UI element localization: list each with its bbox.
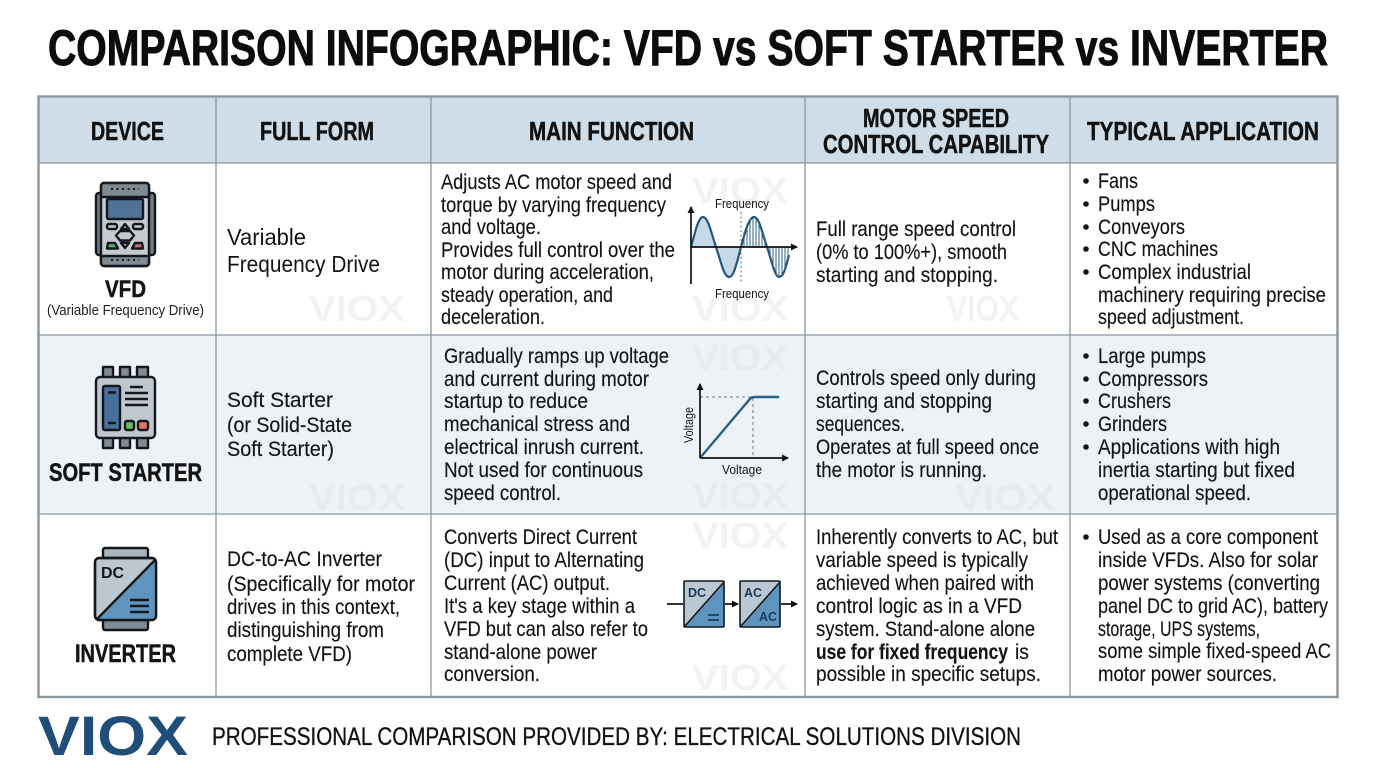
chart: voltage ramp bbox=[681, 384, 788, 477]
main function: Soft Starter bbox=[444, 345, 669, 505]
main function: VFD: torque by varying frequency bbox=[441, 194, 666, 217]
applications: Inverter: motor power sources. bbox=[1098, 663, 1277, 686]
speed control: Soft Starter: sequences. bbox=[816, 413, 905, 436]
applications: VFD: Pumps bbox=[1098, 193, 1155, 216]
sublabel: Variable Frequency Drive: (Variable Frequency Drive) bbox=[47, 302, 204, 319]
label: VFD: VFD bbox=[105, 276, 146, 303]
watermarks bbox=[309, 170, 1055, 698]
main function: Soft Starter: Not used for continuous bbox=[444, 459, 643, 482]
applications: VFD: CNC machines bbox=[1098, 238, 1218, 261]
label: Inverter: INVERTER bbox=[75, 640, 176, 668]
applications: Inverter: storage, UPS systems, bbox=[1098, 618, 1260, 641]
grid lines bbox=[38, 96, 1338, 697]
chart: frequency sine wave: Frequency bbox=[715, 286, 769, 301]
full form: Inverter: complete VFD) bbox=[227, 643, 352, 666]
applications: VFD: speed adjustment. bbox=[1098, 306, 1244, 329]
watermarks: VIOX bbox=[947, 288, 1019, 329]
applications: Soft Starter: inertia starting but fixed bbox=[1098, 459, 1295, 482]
icon: soft starter bbox=[96, 367, 155, 448]
speed control: VFD: (0% to 100%+), smooth bbox=[816, 241, 1007, 264]
full form: VFD: Frequency Drive bbox=[227, 251, 380, 277]
main function: Soft Starter: mechanical stress and bbox=[444, 413, 630, 436]
main function: VFD: steady operation, and bbox=[441, 284, 613, 307]
row: VFD bbox=[47, 170, 1326, 329]
speed control: VFD bbox=[816, 218, 1016, 287]
watermarks: VIOX bbox=[692, 288, 788, 329]
speed control: Inverter: Inherently converts to AC, but bbox=[816, 526, 1058, 549]
watermarks: VIOX bbox=[309, 477, 405, 518]
logo: VIOX: VIOX bbox=[38, 704, 188, 767]
speed control: Soft Starter: Operates at full speed once bbox=[816, 436, 1039, 459]
row 2 background bbox=[38, 335, 1338, 514]
speed control: Soft Starter: starting and stopping bbox=[816, 390, 992, 413]
applications: VFD: Complex industrial bbox=[1098, 261, 1251, 284]
applications: Soft Starter: Grinders bbox=[1098, 413, 1167, 436]
applications: Soft Starter bbox=[1083, 345, 1295, 505]
table header background bbox=[38, 97, 1338, 163]
diagram: DC to AC conversion bbox=[667, 581, 797, 627]
applications: Inverter: Used as a core component bbox=[1098, 526, 1318, 549]
speed control: Soft Starter bbox=[816, 367, 1039, 482]
main function: VFD: deceleration. bbox=[441, 306, 545, 329]
applications: Soft Starter: Large pumps bbox=[1098, 345, 1206, 368]
chart: frequency sine wave: Frequency bbox=[715, 196, 769, 211]
speed control: Inverter: is bbox=[1015, 641, 1029, 664]
main function: Inverter: (DC) input to Alternating bbox=[444, 549, 644, 572]
footer credit: PROFESSIONAL COMPARISON PROVIDED BY: ELECTRICAL SOLUTIONS DIVISION bbox=[212, 723, 1021, 751]
main function: Inverter: conversion. bbox=[444, 663, 540, 686]
speed control: Soft Starter: the motor is running. bbox=[816, 459, 987, 482]
main function: Inverter: It's a key stage within a bbox=[444, 595, 635, 618]
watermarks: VIOX bbox=[692, 170, 788, 211]
main function: VFD: Provides full control over the bbox=[441, 239, 675, 262]
speed control: Inverter: achieved when paired with bbox=[816, 572, 1034, 595]
speed control: Inverter: variable speed is typically bbox=[816, 549, 1028, 572]
comparison table bbox=[38, 96, 1338, 698]
watermarks: VIOX bbox=[309, 288, 405, 329]
speed control: Inverter: possible in specific setups. bbox=[816, 663, 1041, 686]
header: full form: FULL FORM bbox=[260, 116, 374, 146]
header: motor speed control capability bbox=[823, 103, 1049, 159]
header: motor speed control capability: CONTROL CAPABILITY bbox=[823, 129, 1049, 159]
applications: Soft Starter: operational speed. bbox=[1098, 482, 1251, 505]
watermarks: VIOX bbox=[692, 515, 788, 556]
full form: Inverter: (Specifically for motor bbox=[227, 573, 415, 596]
applications: VFD bbox=[1083, 170, 1326, 329]
speed control: VFD: starting and stopping. bbox=[816, 264, 998, 287]
main function: Inverter: Converts Direct Current bbox=[444, 526, 637, 549]
label: Soft Starter: SOFT STARTER bbox=[49, 459, 202, 487]
row: Soft Starter bbox=[49, 345, 1295, 505]
main function: Soft Starter: speed control. bbox=[444, 482, 561, 505]
applications: Soft Starter: Compressors bbox=[1098, 368, 1208, 391]
diagram: DC to AC conversion: AC bbox=[759, 610, 777, 624]
chart: voltage ramp: Voltage bbox=[681, 407, 696, 443]
full form: VFD: Variable bbox=[227, 224, 306, 250]
applications: Inverter: some simple fixed-speed AC bbox=[1098, 640, 1331, 663]
row: Inverter bbox=[75, 526, 1331, 686]
main function: Inverter: VFD but can also refer to bbox=[444, 618, 648, 641]
applications: Inverter: inside VFDs. Also for solar bbox=[1098, 549, 1318, 572]
full form: Inverter: distinguishing from bbox=[227, 619, 384, 642]
main function: Inverter: stand-alone power bbox=[444, 641, 597, 664]
applications: Soft Starter: Applications with high bbox=[1098, 436, 1280, 459]
main function: VFD: and voltage. bbox=[441, 216, 541, 239]
speed control: Inverter: use for fixed frequency bbox=[816, 641, 1008, 664]
watermarks: VIOX bbox=[692, 657, 788, 698]
watermarks: VIOX bbox=[955, 477, 1055, 518]
watermarks: VIOX bbox=[692, 337, 788, 378]
header: motor speed control capability: MOTOR SPEED bbox=[863, 103, 1009, 133]
applications: VFD: machinery requiring precise bbox=[1098, 284, 1326, 307]
icon: VFD drive bbox=[96, 183, 155, 266]
applications: Inverter: power systems (converting bbox=[1098, 572, 1320, 595]
diagram: DC to AC conversion: AC bbox=[744, 586, 762, 600]
main function: Soft Starter: electrical inrush current. bbox=[444, 436, 644, 459]
watermarks: VIOX bbox=[692, 475, 788, 516]
full form: Inverter: drives in this context, bbox=[227, 596, 400, 619]
applications: Inverter: panel DC to grid AC), battery bbox=[1098, 595, 1328, 618]
speed control: Soft Starter: Controls speed only during bbox=[816, 367, 1036, 390]
header: main function: MAIN FUNCTION bbox=[529, 116, 694, 146]
icon: inverter bbox=[95, 548, 156, 630]
full form: Soft Starter: Soft Starter bbox=[227, 389, 333, 412]
chart: frequency sine wave bbox=[691, 196, 797, 301]
full form: Soft Starter: Soft Starter) bbox=[227, 438, 334, 461]
full form: Inverter bbox=[227, 548, 415, 666]
applications: Soft Starter: Crushers bbox=[1098, 390, 1171, 413]
main function: Soft Starter: and current during motor bbox=[444, 368, 649, 391]
main function: Soft Starter: startup to reduce bbox=[444, 390, 588, 413]
speed control: Inverter: system. Stand-alone alone bbox=[816, 618, 1035, 641]
chart: voltage ramp: Voltage bbox=[722, 462, 762, 477]
diagram: DC to AC conversion: DC bbox=[688, 586, 706, 600]
applications: VFD: Fans bbox=[1098, 170, 1138, 193]
main function: VFD bbox=[441, 171, 675, 329]
full form: Soft Starter bbox=[227, 389, 352, 461]
main function: VFD: Adjusts AC motor speed and bbox=[441, 171, 672, 194]
applications: Inverter bbox=[1083, 526, 1331, 686]
speed control: VFD: Full range speed control bbox=[816, 218, 1016, 241]
speed control: Inverter: control logic as in a VFD bbox=[816, 595, 1022, 618]
full form: Inverter: DC-to-AC Inverter bbox=[227, 548, 382, 571]
header: device: DEVICE bbox=[91, 116, 164, 146]
full form: Soft Starter: (or Solid-State bbox=[227, 414, 352, 437]
main function: Inverter: Current (AC) output. bbox=[444, 572, 610, 595]
main function: Soft Starter: Gradually ramps up voltage bbox=[444, 345, 669, 368]
header: typical application: TYPICAL APPLICATION bbox=[1087, 116, 1319, 146]
main function: Inverter bbox=[444, 526, 648, 686]
speed control: Inverter bbox=[816, 526, 1058, 686]
icon: inverter: DC bbox=[101, 565, 125, 582]
main function: VFD: motor during acceleration, bbox=[441, 261, 654, 284]
full form: VFD bbox=[227, 224, 380, 277]
applications: VFD: Conveyors bbox=[1098, 216, 1185, 239]
